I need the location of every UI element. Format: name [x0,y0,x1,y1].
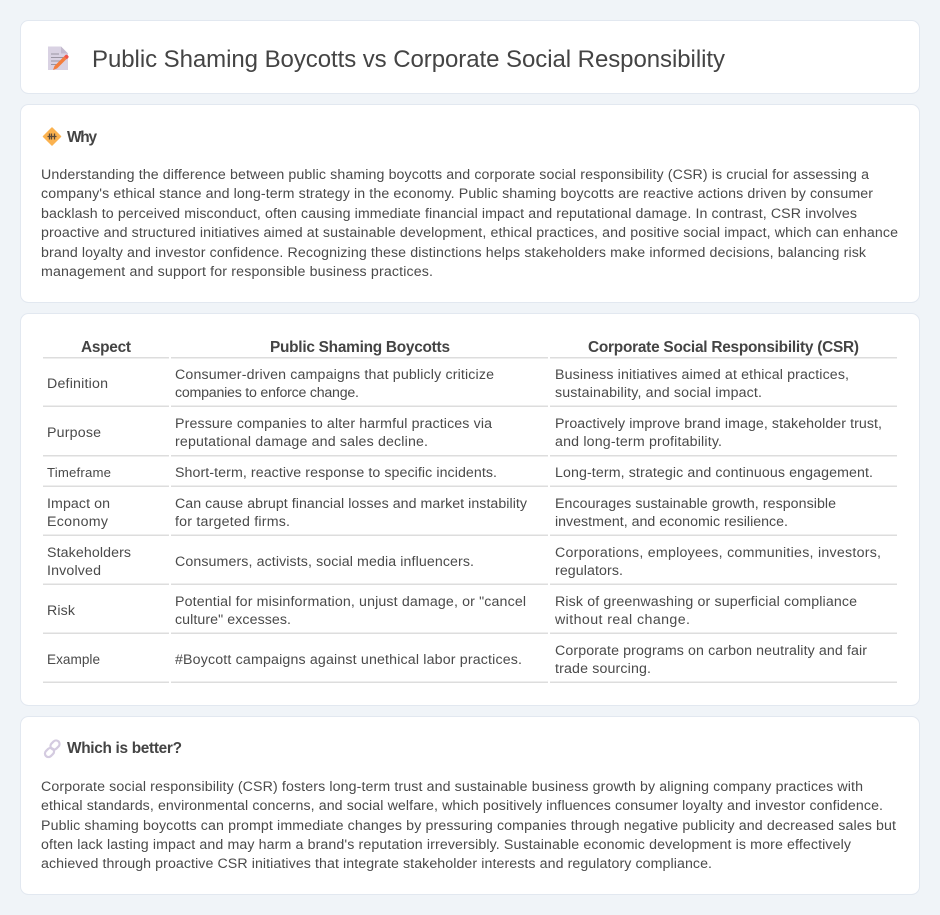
row: impact on economy: investment, and economic resilience. [555,514,788,530]
text block: why paragraph: Understanding the difference between public shaming boycotts and corporate social responsibility (CSR) is crucial for assessing a [41,167,869,183]
icon: memo with pencil [48,46,69,70]
text block: which is better paragraph [41,779,896,872]
row: definition: sustainability, and social impact. [555,385,762,401]
text block: which is better paragraph: Corporate social responsibility (CSR) fosters long-term trust and sustainable business growth by aligning company practices with [41,779,863,795]
row: definition: Business initiatives aimed at ethical practices, [555,367,849,383]
heading: why: Why [67,129,97,146]
row: purpose: reputational damage and sales decline. [175,434,428,450]
text block: why paragraph: company's ethical stance and long-term strategy in the economy. Public shaming boycotts are reactive actions driven by consumer [41,186,873,202]
panel: title card [20,20,920,94]
title: Public Shaming Boycotts vs Corporate Social Responsibility [92,46,725,73]
row: stakeholders involved: Consumers, activists, social media influencers. [175,554,474,570]
row: timeframe: Short-term, reactive response to specific incidents. [175,465,497,481]
row: example: #Boycott campaigns against unethical labor practices. [175,652,522,668]
row: risk: culture" excesses. [175,612,291,628]
icon: diamond sign [44,128,60,145]
row: risk: Risk of greenwashing or superficial compliance [555,594,857,610]
icon: link [43,739,61,759]
row: example [47,643,867,677]
row: stakeholders involved: regulators. [555,563,623,579]
row: risk [47,594,857,628]
row: example: Corporate programs on carbon neutrality and fair [555,643,867,659]
row: impact on economy: Encourages sustainable growth, responsible [555,496,836,512]
row: impact on economy: for targeted firms. [175,514,290,530]
row: example: trade sourcing. [555,661,651,677]
row: definition: companies to enforce change. [175,385,359,401]
row: definition [47,367,849,401]
row: impact on economy [47,496,836,530]
table header row: Public Shaming Boycotts [270,339,450,356]
row: risk: without real change. [554,612,690,628]
row: risk: Risk [47,603,76,619]
row: timeframe: Long-term, strategic and continuous engagement. [555,465,873,481]
row: definition: Definition [47,376,108,392]
panel: which is better [20,716,920,894]
text block: why paragraph [41,167,898,280]
row: stakeholders involved: Corporations, employees, communities, investors, [555,545,881,561]
text block: which is better paragraph: ethical standards, environmental concerns, and social welfare, which positively influences consumer loyalty and investor confidence. [41,798,883,814]
table header row [81,339,859,356]
row: stakeholders involved: Involved [47,563,101,579]
panel: why [20,104,920,302]
text block: which is better paragraph: often lack lasting impact and may harm a brand's reputation irreversibly. Sustainable economic development is more effectively [41,837,852,853]
text block: why paragraph: management and support for responsible business practices. [41,264,433,280]
row: purpose: Purpose [47,425,101,441]
row: purpose: Proactively improve brand image, stakeholder trust, [555,416,882,432]
text block: which is better paragraph: Public shaming boycotts can prompt immediate changes by pressuring companies through negative publicity and decreased sales but [41,818,896,834]
panel: comparison table [20,314,920,706]
row: definition: Consumer-driven campaigns that publicly criticize [175,367,494,383]
text block: which is better paragraph: achieved through proactive CSR initiatives that integrate stakeholder interests and regulatory compliance. [41,856,712,872]
row: purpose: Pressure companies to alter harmful practices via [175,416,492,432]
row: purpose [47,416,882,450]
text block: why paragraph: backlash to perceived misconduct, often causing immediate financial impact and reputational damage. In contrast, CSR involves [41,206,857,222]
row: timeframe: Timeframe [47,465,111,480]
row: impact on economy: Impact on [47,496,110,512]
row: timeframe [47,465,873,481]
row: purpose: and long-term profitability. [555,434,722,450]
row: impact on economy: Can cause abrupt financial losses and market instability [175,496,528,512]
text block: why paragraph: proactive and structured initiatives aimed at sustainable development, ethical practices, and positive social impact, which can enhance [41,225,898,241]
heading: which is better: Which is better? [67,740,182,757]
row: risk: Potential for misinformation, unjust damage, or "cancel [175,594,526,610]
text block: why paragraph: brand loyalty and investor confidence. Recognizing these distinctions helps stakeholders make informed decisions, balancing risk [41,245,867,261]
row: example: Example [47,652,100,667]
row: impact on economy: Economy [47,514,109,530]
row: stakeholders involved [47,545,881,579]
table header row: Corporate Social Responsibility (CSR) [588,339,859,356]
table header row: Aspect [81,339,131,356]
row: stakeholders involved: Stakeholders [47,545,131,561]
